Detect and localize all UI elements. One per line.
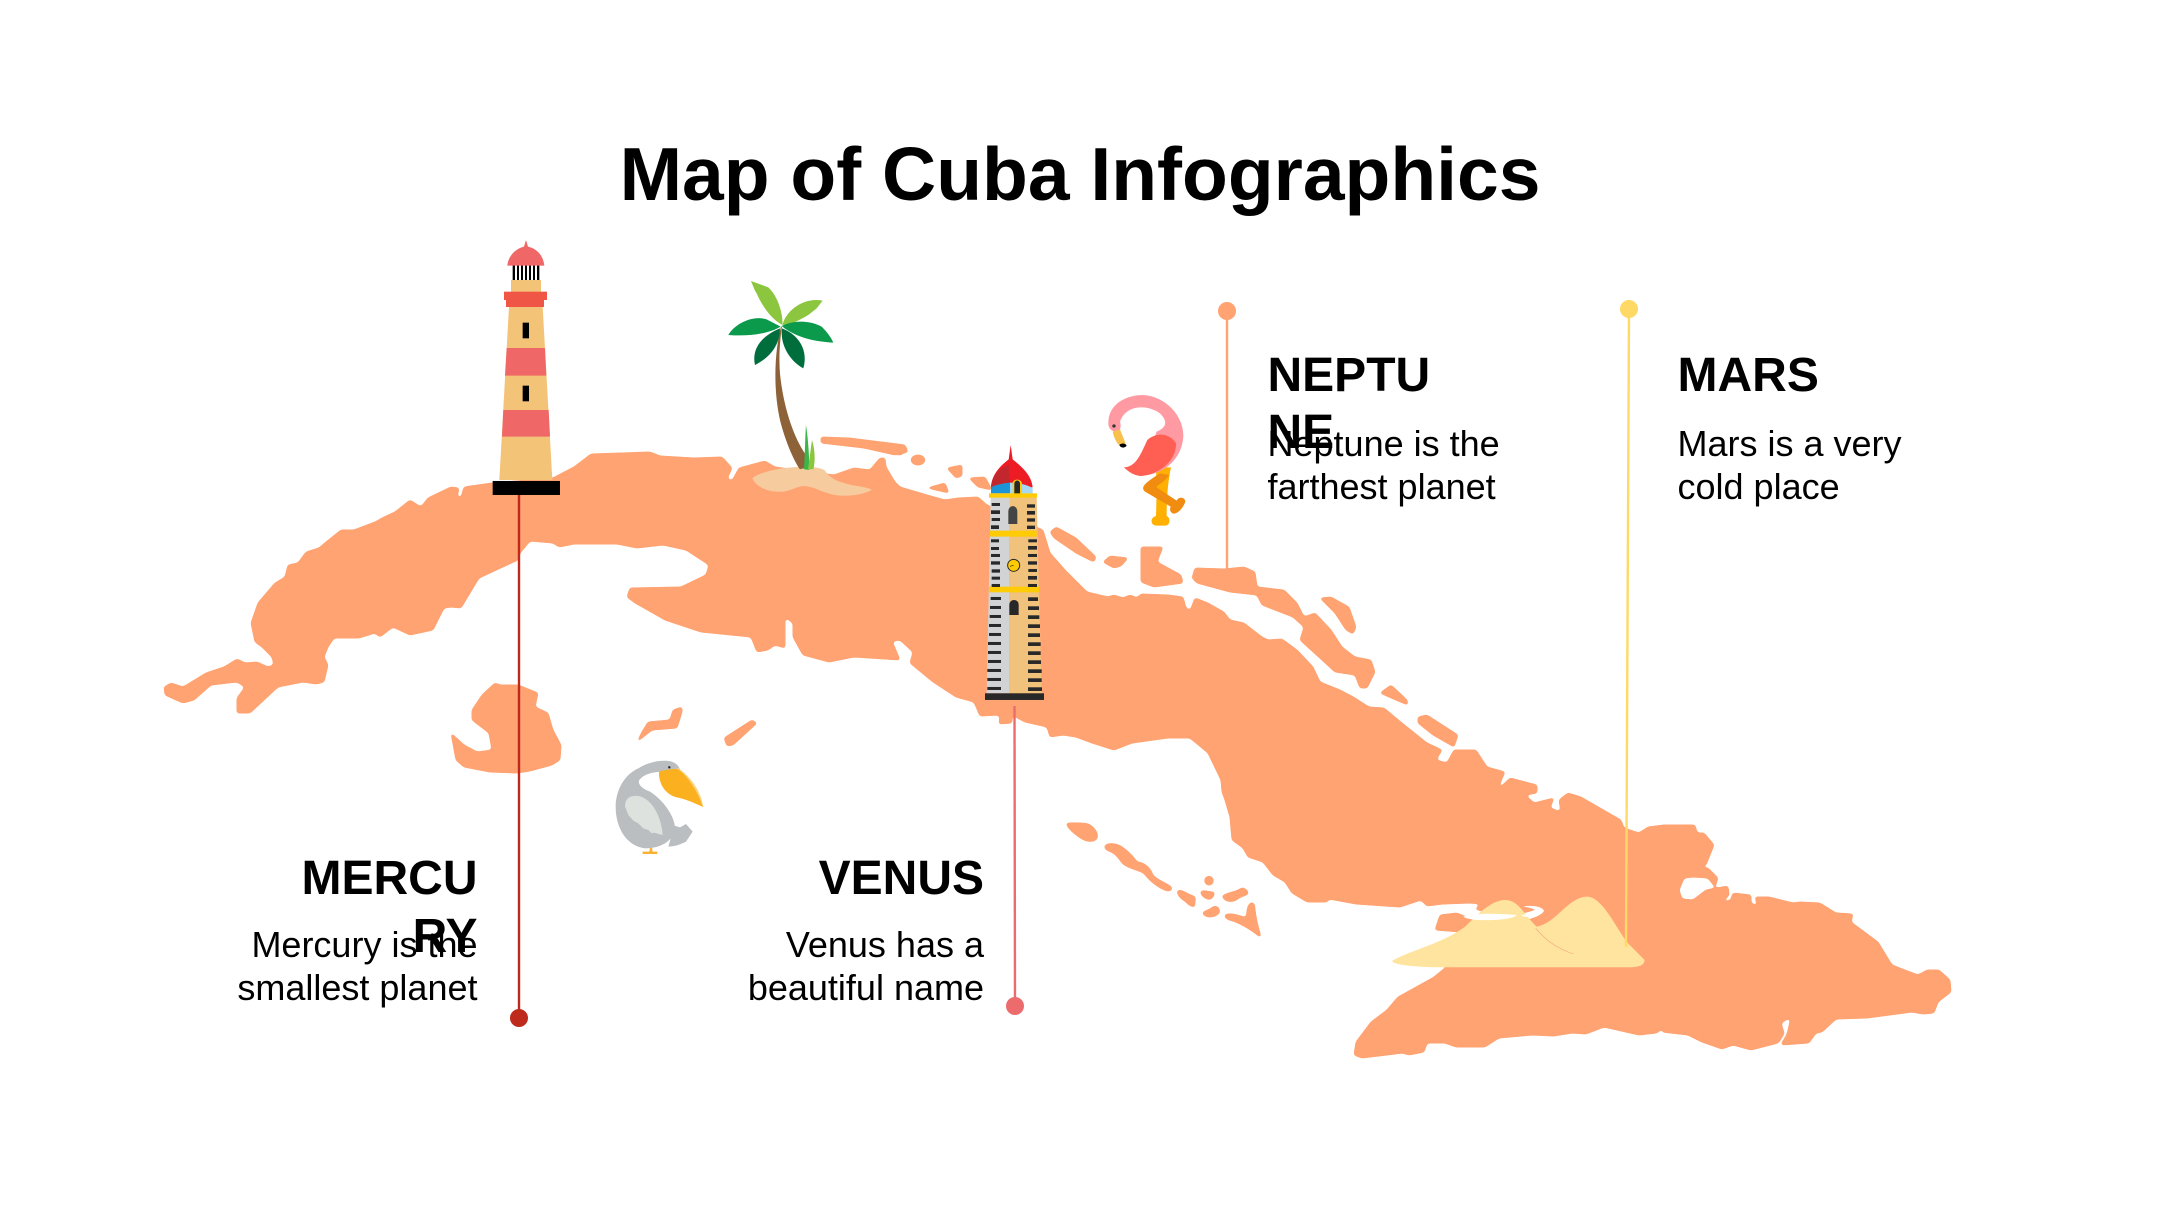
description: Neptune: farthest planet [1268, 466, 1496, 507]
northeastern cays [1050, 527, 1096, 562]
heading: Venus: VENUS [819, 852, 984, 905]
text block: Venus [748, 852, 984, 1008]
icon: volcano mountains [1392, 897, 1645, 967]
map of Cuba [164, 437, 1951, 1058]
title: Map of Cuba Infographics [620, 132, 1540, 216]
description: Mercury: Mercury is the [251, 924, 478, 965]
description: Neptune: Neptune is the [1268, 423, 1500, 464]
description: Neptune [1268, 423, 1500, 507]
icon: flamingo [1108, 395, 1185, 526]
text block: Mars [1678, 349, 1902, 507]
description: Venus: Venus has a [786, 924, 984, 965]
Venus leader line [1006, 706, 1024, 1015]
heading: Mercury: MERCURY [302, 852, 478, 963]
description: Mars: Mars is a very [1678, 423, 1902, 464]
heading: Neptune: NEPTUNE [1268, 349, 1430, 459]
description: Venus: beautiful name [748, 967, 984, 1008]
heading: Mars: MARS [1678, 349, 1819, 402]
description: Mercury: smallest planet [237, 967, 478, 1008]
sand patch [752, 467, 872, 496]
icon: pelican [616, 761, 703, 854]
description: Venus [748, 924, 984, 1008]
Jardines de la Reina cays [1065, 822, 1262, 937]
text block: Mercury [237, 852, 478, 1008]
small southwest cays [637, 707, 682, 742]
description: Mercury [237, 924, 478, 1008]
description: Mars [1678, 423, 1902, 507]
Mercury leader line [510, 481, 528, 1027]
Isla de la Juventud [451, 683, 561, 773]
text block: Neptune [1268, 349, 1500, 507]
Neptune leader line [1218, 302, 1236, 573]
main island [164, 452, 1951, 1058]
northern cays [821, 437, 908, 455]
description: Mars: cold place [1678, 466, 1840, 507]
icon: palm tree [728, 281, 872, 496]
Mars leader line [1620, 300, 1638, 947]
icon: bell tower [985, 445, 1044, 700]
icon: lighthouse [493, 240, 560, 495]
